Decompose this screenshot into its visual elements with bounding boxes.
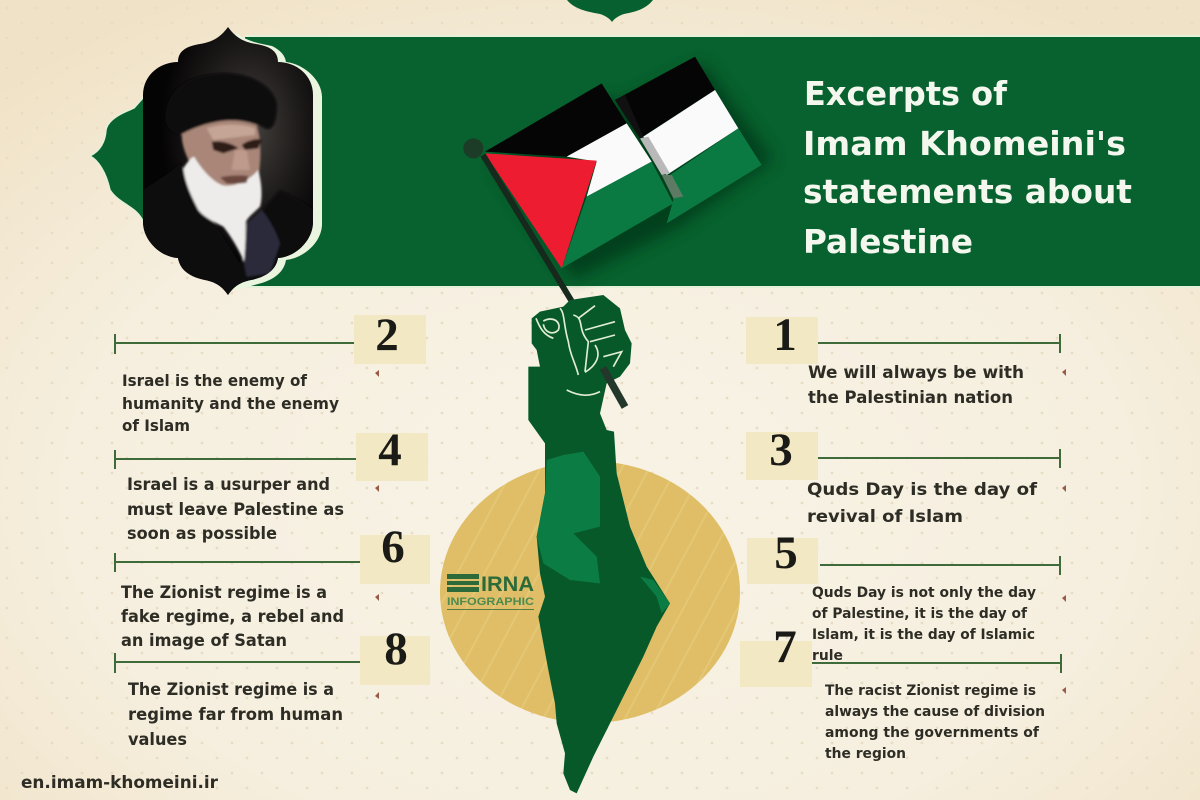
item 3: Quds Day is the day of <box>807 480 1038 500</box>
item 7 <box>740 621 1061 762</box>
item 2: of Islam <box>122 416 190 435</box>
IRNA infographic logo: INFOGRAPHIC <box>447 596 534 608</box>
item 7: among the governments of <box>825 725 1040 741</box>
item 2: 2 <box>375 309 399 361</box>
left ornament of portrait frame <box>90 90 150 222</box>
title: Palestine <box>803 222 973 261</box>
Gaza <box>640 577 670 613</box>
item 3: revival of Islam <box>807 507 963 527</box>
item 3 <box>746 424 1060 527</box>
item 7: always the cause of division <box>825 704 1045 720</box>
top ornament <box>567 0 653 22</box>
forehead highlight <box>207 125 255 140</box>
back flag <box>615 57 762 223</box>
portrait of Imam Khomeini <box>140 25 316 300</box>
item 2 <box>115 309 426 435</box>
fist and map of Palestine <box>528 295 670 793</box>
item 5: Quds Day is not only the day <box>812 585 1037 601</box>
item 1: the Palestinian nation <box>808 388 1013 407</box>
item 8: The Zionist regime is a <box>128 680 334 699</box>
West Bank <box>537 452 600 583</box>
turban <box>165 73 277 135</box>
inner garment <box>243 210 280 277</box>
item 5: of Palestine, it is the day of <box>812 606 1028 622</box>
item 6: 6 <box>381 521 405 573</box>
robe <box>143 163 313 300</box>
item 8: 8 <box>384 623 408 675</box>
item 5: Islam, it is the day of Islamic <box>812 627 1035 643</box>
item 5: 5 <box>774 527 798 579</box>
front flag <box>485 83 673 268</box>
item 5: rule <box>812 648 843 664</box>
item 6: an image of Satan <box>121 631 287 650</box>
title: Excerpts of <box>804 74 1008 113</box>
website footer: en.imam-khomeini.ir <box>21 773 219 793</box>
flag pole <box>483 155 574 305</box>
item 2: humanity and the enemy <box>122 394 340 413</box>
green banner <box>245 35 1200 288</box>
IRNA infographic logo <box>447 573 534 610</box>
fist finger lines <box>536 306 622 395</box>
title <box>803 74 1132 261</box>
item 6 <box>115 521 430 650</box>
item 1 <box>746 309 1060 407</box>
item 3: 3 <box>769 424 793 476</box>
map silhouette <box>528 295 670 793</box>
item 4: Israel is a usurper and <box>127 475 330 494</box>
small chevron marks <box>375 369 1066 699</box>
item 7: the region <box>825 746 906 762</box>
title: Imam Khomeini's <box>803 124 1126 163</box>
flag pole top <box>463 138 483 158</box>
IRNA infographic logo: IRNA <box>481 573 534 596</box>
item 6: The Zionist regime is a <box>121 583 327 602</box>
item 2: Israel is the enemy of <box>122 371 308 390</box>
Palestinian flag <box>463 57 773 280</box>
eyebrows <box>212 139 262 153</box>
item 4: soon as possible <box>127 524 277 543</box>
item 8: values <box>128 730 187 749</box>
item 1: We will always be with <box>808 363 1024 382</box>
flag shadow <box>493 63 773 280</box>
item 5 <box>747 527 1060 664</box>
title: statements about <box>803 172 1132 211</box>
gold circle <box>440 461 740 723</box>
item 6: fake regime, a rebel and <box>121 607 344 626</box>
mouth <box>220 175 248 184</box>
nose highlight <box>232 150 250 170</box>
item 8 <box>115 623 430 749</box>
flag pole lower end <box>603 368 625 407</box>
beard <box>183 157 262 262</box>
item 4: 4 <box>378 424 402 476</box>
item 7: 7 <box>773 621 797 673</box>
item 1: 1 <box>773 309 797 361</box>
portrait frame outline <box>236 33 322 290</box>
item 8: regime far from human <box>128 705 343 724</box>
item 4: must leave Palestine as <box>127 500 344 519</box>
item 4 <box>115 424 428 543</box>
face <box>182 120 260 190</box>
item 7: The racist Zionist regime is <box>825 683 1036 699</box>
